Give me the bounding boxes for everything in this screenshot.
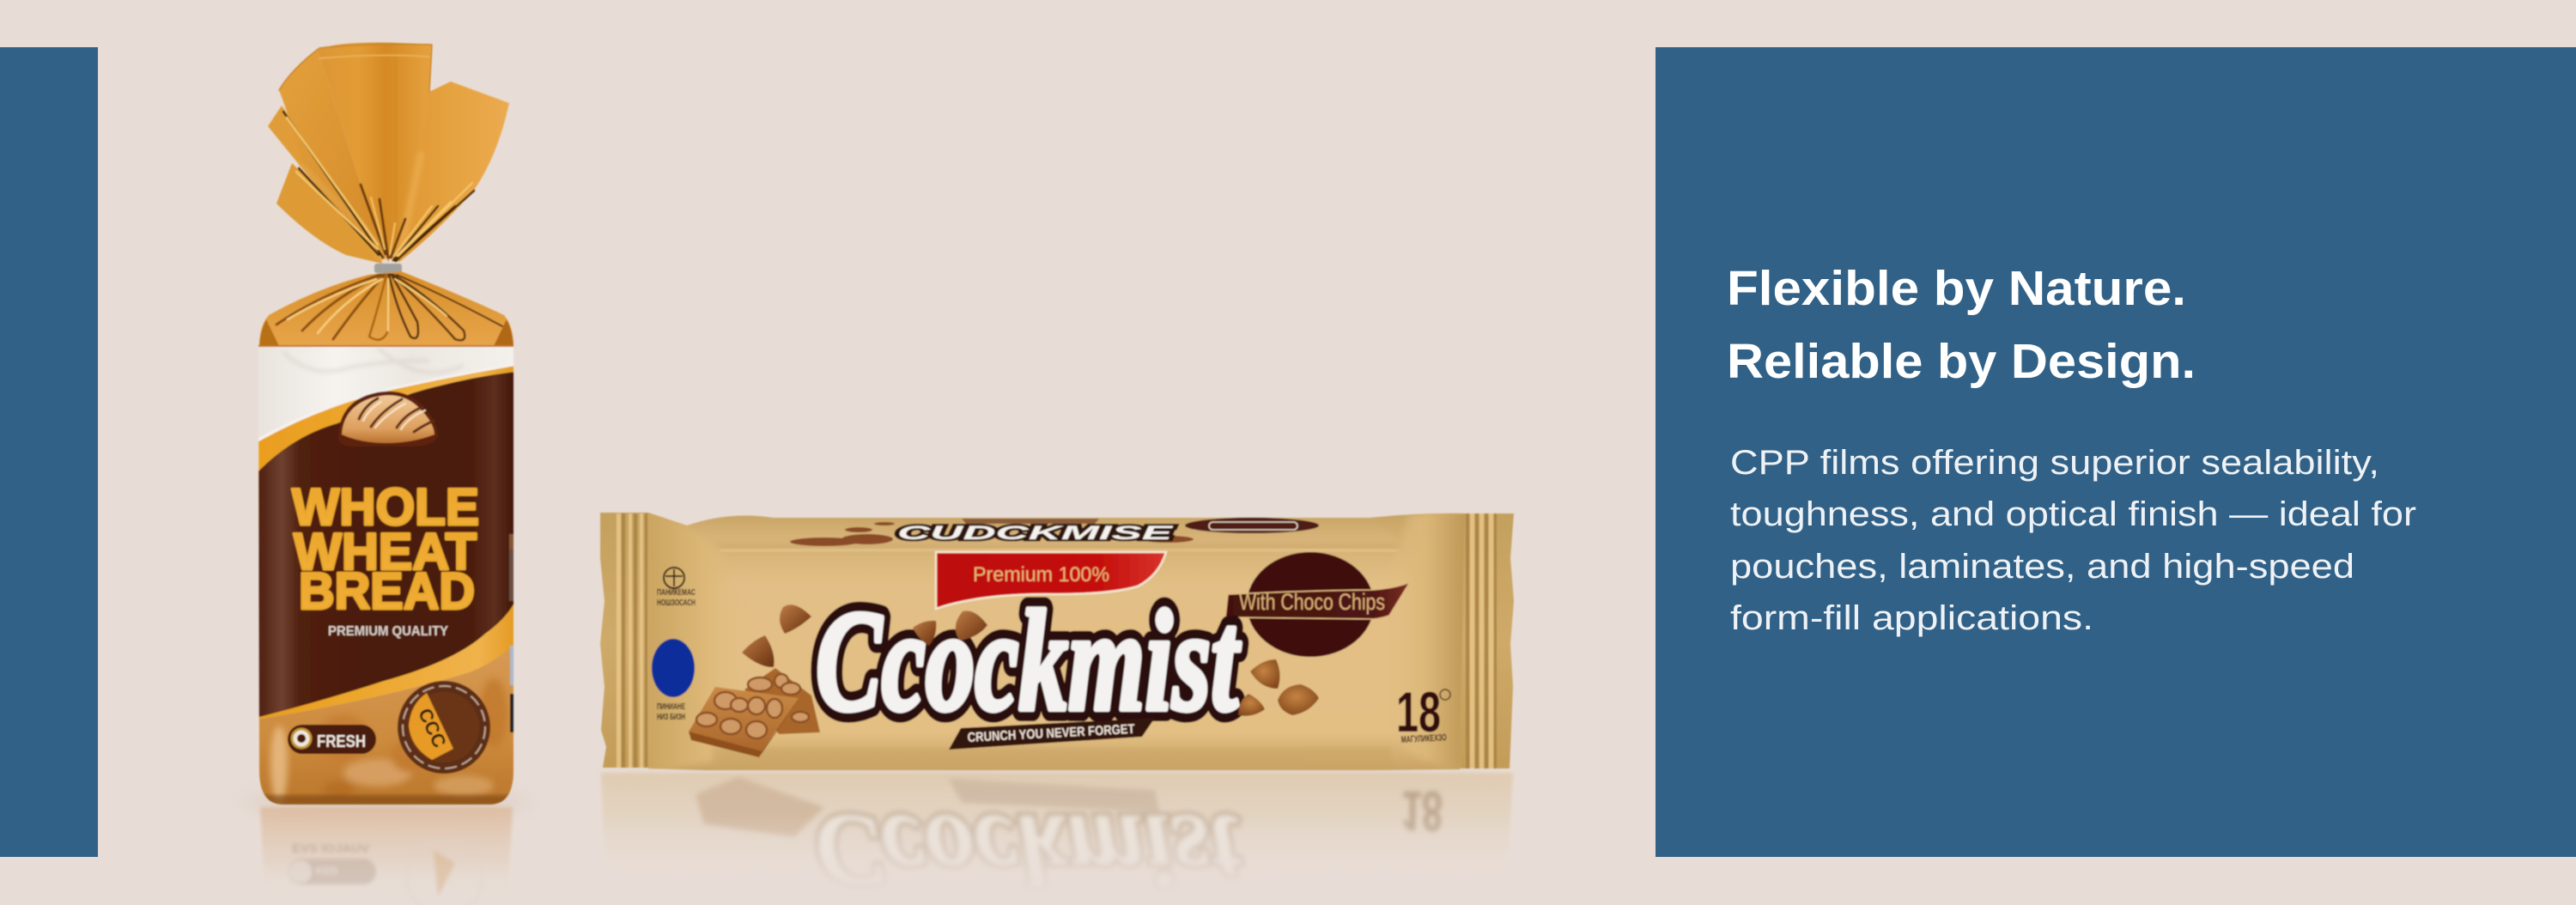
- bag gather: [259, 271, 513, 346]
- tagline: PREMIUM QUALITY: [328, 624, 448, 639]
- panel: right blue text panel: [1656, 47, 2576, 857]
- body text: toughness, and optical finish — ideal for: [1730, 495, 2416, 533]
- body text: pouches, laminates, and high-speed: [1730, 548, 2354, 586]
- red banner: [936, 552, 1166, 609]
- left small print: НИЗ БИЗН: [657, 713, 685, 722]
- pack left crimp: [600, 513, 648, 768]
- pack reflection: 18: [1401, 780, 1443, 843]
- product: bread bag: [256, 43, 515, 807]
- logo wordmark: Ccockmist: [816, 581, 1241, 741]
- logo wordmark: [816, 581, 1241, 741]
- bread reflection: EVS IOJAUV: [292, 841, 369, 856]
- shadow under bread: [240, 796, 532, 808]
- strap: crunch you never forget: [949, 718, 1155, 750]
- heading: Reliable by Design.: [1727, 334, 2196, 389]
- heading: Flexible by Nature.: [1727, 261, 2186, 316]
- dark circle and ribbon: [1225, 552, 1410, 657]
- red banner: Premium 100%: [973, 563, 1109, 586]
- bag top fan: [268, 43, 509, 264]
- brand text: whole wheat bread: [292, 478, 479, 620]
- seal: CCC: [414, 705, 451, 751]
- badge: fresh: FRESH: [317, 732, 366, 751]
- top-face print: CUDCKMISE: [897, 522, 1175, 544]
- bread reflection: [260, 807, 513, 905]
- top-face print: [790, 518, 1319, 546]
- bread reflection: KED: [316, 865, 338, 877]
- heading: [1727, 261, 2196, 389]
- icon: chocolate chips: [742, 604, 987, 667]
- bag body: [256, 343, 515, 807]
- left small print: [657, 568, 696, 722]
- pack body: [644, 507, 1468, 773]
- pack reflection: [597, 773, 1517, 905]
- weight mark: 18: 18: [1396, 680, 1441, 744]
- icon: biscuits: [689, 668, 820, 757]
- brand text: whole wheat bread: WHOLE: [292, 478, 479, 536]
- brand text: whole wheat bread: WHEAT: [294, 523, 477, 580]
- strap: crunch you never forget: CRUNCH YOU NEVER FORGET: [967, 722, 1135, 745]
- left small print: ПАНИКЕМАС: [657, 588, 696, 598]
- badge: fresh: [288, 725, 376, 754]
- bag neck tie: [374, 264, 402, 273]
- logo wordmark: Ccockmist: [816, 581, 1241, 741]
- pack right crimp: [1460, 513, 1514, 768]
- shadow under pack: [601, 765, 1511, 772]
- left small print: ПИНИАНЕ: [657, 702, 685, 712]
- seal: [398, 681, 490, 774]
- body text: CPP films offering superior sealability,: [1730, 444, 2379, 482]
- product: biscuit pack: [600, 507, 1514, 773]
- weight mark: 18: МАГУЛИКЕХЗО: [1401, 732, 1447, 745]
- icon: hazelnuts: [1238, 659, 1319, 716]
- icon: loaf: [338, 392, 438, 446]
- dark circle and ribbon: With Choco Chips: [1239, 589, 1385, 615]
- icon: blue dot: [652, 639, 695, 697]
- brand text: whole wheat bread: BREAD: [299, 562, 475, 620]
- body text: [1730, 444, 2416, 637]
- left small print: НОШЗОСАСН: [657, 598, 696, 608]
- body text: form-fill applications.: [1730, 599, 2093, 637]
- panel: left blue bar: [0, 47, 98, 857]
- pack reflection: Ccockmist: [816, 793, 1241, 905]
